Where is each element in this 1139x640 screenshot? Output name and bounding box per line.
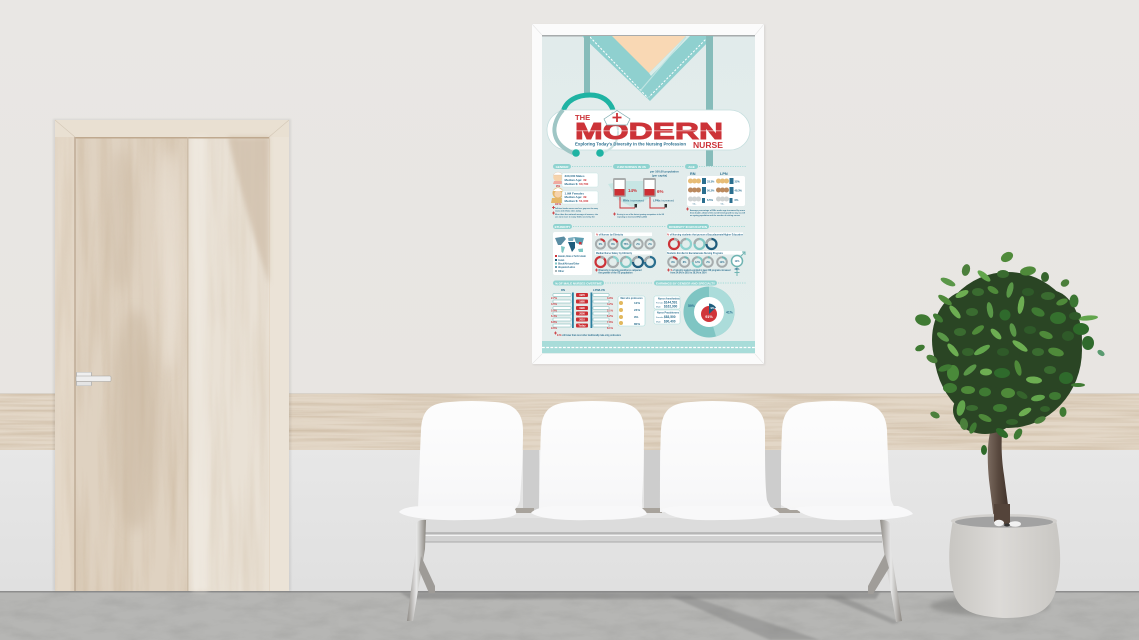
leaves [914, 250, 1106, 455]
card: world map and legend [553, 232, 592, 275]
ring row values: ethnicity [599, 243, 653, 246]
card: male stats: Median $: 60,700 [564, 182, 589, 186]
male percent values: 2.7% [551, 296, 558, 300]
scrubs collar [582, 36, 714, 101]
heading: diversity in education: DIVERSITY IN EDUCATION [669, 225, 707, 229]
icon: female nurse: 91% [555, 202, 561, 206]
chair 3 [660, 401, 780, 520]
male percent values: 3.5% [551, 302, 558, 306]
potted plant [914, 250, 1106, 618]
note: enrollment: from 24.8% in 2010 to 28.3% in 2014 [670, 272, 707, 274]
note: gender pay: Full-time female nurses earn less, gap seen for many [555, 207, 599, 210]
door leaf left plank [75, 137, 188, 591]
bench legs [407, 520, 902, 622]
map backdrop [608, 181, 656, 207]
ring row values: enrolled: 12% [720, 261, 725, 264]
RN and LPN increase labels [623, 198, 674, 202]
syringes LPN column [593, 294, 609, 327]
world map [555, 236, 584, 253]
section: nurses in US [608, 164, 684, 218]
title banner [547, 110, 750, 157]
framed poster [532, 24, 765, 365]
card: nurse anesthetists earnings: $162,900 [664, 304, 678, 308]
door handle [76, 372, 111, 386]
year labels: 1970 [579, 294, 585, 297]
male percent values: 6.4% [551, 314, 558, 318]
ring chart row: enrolled students [668, 257, 727, 267]
shadow on wall and floor [400, 450, 900, 640]
heading: gender: GENDER [556, 165, 569, 169]
column labels RN and LPN: LPN/LVN [593, 288, 605, 292]
LPN age bars: 32% [734, 180, 740, 184]
ring chart row: salary [596, 257, 655, 267]
male percent values: 5.0% [551, 308, 558, 312]
heading: age: AGE [688, 165, 695, 169]
map legend: Hispanic/Latino [558, 266, 576, 269]
note: age: as ageing population and the number of retiring nurses [690, 214, 741, 217]
card: female stats: 1.9M Females [564, 192, 584, 196]
RN age bars: 33.3% [707, 180, 715, 184]
title: NURSE: NURSE [693, 141, 724, 150]
card: nurse anesthetists earnings: Male [656, 306, 662, 308]
chair 4 [781, 401, 913, 520]
year labels: 1990 [579, 307, 585, 310]
note: male earnings: 9.6% still lower than most other traditionally male-only professions [557, 334, 621, 337]
label: students enrolled: Students Enrolled in Baccalaureate Nursing Programs [667, 251, 723, 255]
ring row values: enrolled: 12% [695, 261, 701, 264]
card: men who profession: 80% [634, 322, 640, 326]
chair 1 [399, 401, 523, 520]
icon: gender symbol ring: 88% [735, 268, 740, 271]
per population text [650, 170, 679, 178]
male percent values: 9.6% [551, 326, 558, 330]
LPN age figures: 50+ [721, 204, 725, 206]
donut chart: 9% [710, 306, 715, 310]
icon: gender symbol ring: 12% [735, 260, 740, 263]
card: nurse practitioners earnings [654, 310, 680, 324]
year labels: 2010 [579, 318, 585, 322]
RN and LPN increase labels: RNs increased [623, 198, 644, 202]
per population text: per 100,00 population [650, 170, 679, 174]
card: nurse practitioners earnings: Male [656, 322, 662, 324]
card: men who profession: 9% [634, 315, 639, 319]
heading: ethnicity: ETHNICITY [555, 225, 570, 229]
ring row values: ethnicity: 2% [636, 243, 641, 246]
male percent values [551, 296, 614, 330]
card: men who profession: 24% [634, 308, 640, 312]
ring row values: ethnicity: 2% [648, 243, 653, 246]
blood bag: RN: 14% [628, 188, 637, 193]
donut chart: 59% [688, 304, 695, 308]
card: nurse anesthetists earnings: $144,591 [664, 300, 678, 304]
male percent values: 6.2% [607, 314, 614, 318]
note: growth: expecting an increase (19%) by 2022 [617, 216, 648, 218]
card: men who profession: 12% [634, 301, 640, 305]
card: age RN and LPN: LPN [720, 172, 728, 176]
map legend: Asian [558, 259, 565, 262]
heading: earnings: EARNINGS BY GENDER AND SPECIALTY [656, 281, 715, 285]
male percent values: 3.9% [607, 296, 614, 300]
map legend: Black/African/Other [558, 262, 580, 266]
donut chart: 41% [726, 310, 733, 314]
bench rail and beam [424, 508, 882, 542]
plungers [572, 292, 592, 328]
card: nurse anesthetists earnings: Nurse Anesthetists [658, 298, 680, 300]
RN age bars [702, 178, 715, 203]
LPN age bars: 48.3% [734, 188, 743, 192]
male percent values: 4.2% [607, 302, 614, 306]
LPN age bars: 6% [734, 198, 739, 202]
card: male stats [562, 173, 598, 187]
section: male nurses over time [551, 280, 653, 337]
heading: male nurses: % OF MALE NURSES OVERTIME [555, 281, 602, 285]
stethoscope left tube and tips [554, 110, 618, 157]
white poster frame [532, 24, 764, 364]
note: growth: Nursing is one of the fastest growing occupations in the US [617, 213, 664, 216]
ring row values: ethnicity: 8% [611, 243, 616, 246]
note: enrollment: % of minority students enrolled in basic RN programs increased [670, 269, 731, 272]
label: median nurse salary: Median Nurse Salary by Ethnicity [596, 251, 632, 255]
card: nurse practitioners earnings: $83,500 [664, 315, 676, 319]
RN and LPN increase labels: LPNs increased [653, 198, 674, 202]
ring chart row: nurses by ethnicity [596, 239, 655, 249]
year labels: 1980 [579, 300, 585, 304]
section: age [685, 164, 746, 217]
pot [930, 504, 1060, 618]
foliage crown [914, 250, 1106, 455]
note: age: than double, ahead of the overall trend growth to stay as well [690, 212, 745, 214]
card: male stats: Median Age: 39 [564, 178, 587, 182]
title: MODERN: MODERN [575, 118, 723, 144]
note: enrollment [667, 268, 731, 274]
ring chart row: higher education [669, 239, 716, 249]
concrete floor [0, 591, 1139, 640]
nurse cap icon [604, 110, 630, 125]
ring row values: enrolled: 8% [683, 261, 687, 264]
male percent values: 8.1% [607, 326, 614, 330]
male percent values: 8.8% [551, 320, 558, 324]
bench with four chairs [399, 401, 913, 640]
card: age RN and LPN [687, 172, 745, 206]
card: nurse practitioners earnings: Female [656, 317, 664, 319]
card: female stats [562, 191, 598, 204]
card: nurse anesthetists earnings: Female [656, 302, 664, 304]
footer band with stitching [542, 341, 755, 353]
card: male stats: 330,000 Males [564, 174, 585, 178]
note: population: Diversity in nursing workforce outpaced [598, 269, 642, 272]
section: earnings by gender and specialty [654, 280, 746, 338]
card: men who profession: Men who profession [620, 297, 643, 300]
ring row values: enrolled: 2% [706, 261, 711, 264]
wooden wall band [0, 393, 1139, 450]
card: female stats: Median Age: 39 [564, 195, 587, 199]
year labels [578, 294, 586, 328]
note: age [686, 208, 746, 217]
label: percent of nurses by ethnicity: % of Nurses by Ethnicity [596, 232, 623, 236]
door leaf right plank [188, 137, 269, 591]
card: men who profession [618, 296, 645, 326]
icon: male nurse: 9% [556, 184, 560, 188]
map legend: Other [558, 270, 564, 273]
title: THE: THE [575, 113, 590, 122]
donut chart: 91% [705, 315, 713, 319]
stethoscope tubes [584, 36, 713, 166]
door frame [55, 120, 289, 591]
poster paper [542, 35, 755, 354]
label: nursing students: % of Nursing students that pursue a Baccalaureate/Higher Education [667, 232, 743, 236]
per population text: (per capita) [652, 174, 667, 178]
subtitle: Exploring Today's Diversity in the Nursing Profession [575, 142, 686, 146]
card: nurse practitioners earnings: Nurse Practitioners [657, 312, 680, 314]
map legend [555, 255, 586, 273]
year labels: 2000 [579, 312, 585, 316]
note: gender pay: More than the national average of women, she [555, 213, 599, 216]
note: growth [613, 212, 664, 218]
male percent values: 5.1% [607, 308, 614, 312]
RN age bars: 50.2% [707, 188, 715, 192]
door [53, 119, 291, 591]
note: age: Average percentage of RNs under age increased by more [690, 209, 746, 212]
stethoscope head arc [563, 95, 613, 112]
note: gender pay: can earn more in many fields served by her [555, 216, 595, 218]
note: population [595, 268, 642, 274]
ring row values: enrolled [671, 261, 725, 264]
male percent values: 7.8% [607, 320, 614, 324]
RN age bars: 6.5% [707, 198, 714, 202]
section: diversity in education [667, 224, 746, 276]
blood bag: LPN: 6% [657, 189, 664, 194]
map legend: Hawaiian, Native or Pacific Islander [558, 255, 586, 258]
RN age figures: 50+ [693, 204, 697, 206]
note: gender pay: races and ethnic roles today [555, 210, 582, 212]
ring row values: ethnicity: 75% [624, 243, 629, 246]
section: ethnicity [553, 224, 666, 275]
column labels RN and LPN [561, 288, 605, 292]
trunk [988, 420, 1010, 520]
chair 2 [531, 401, 647, 520]
ring row values: enrolled: 9% [671, 261, 676, 264]
card: age RN and LPN: RN [690, 172, 696, 176]
section: gender [551, 164, 612, 218]
note: gender pay [552, 206, 599, 218]
year pills [576, 293, 588, 328]
donut chart [684, 286, 734, 338]
card: female stats: Median $: 51,000 [564, 199, 589, 203]
year labels: Today [578, 324, 586, 328]
card: nurse practitioners earnings: $90,400 [664, 320, 676, 324]
ring row values: ethnicity: 6% [599, 243, 603, 246]
icon: gender symbol ring [732, 252, 745, 276]
foliage mass [932, 272, 1082, 434]
heading: 2.2M nurses: 2.2M NURSES IN US [617, 165, 646, 169]
syringe chart [551, 292, 614, 330]
column labels RN and LPN: RN [561, 288, 565, 292]
LPN age bars [730, 178, 743, 203]
card: nurse anesthetists earnings [654, 296, 680, 309]
note: population: the growth of the US population [598, 272, 633, 274]
syringes RN column [553, 294, 571, 327]
